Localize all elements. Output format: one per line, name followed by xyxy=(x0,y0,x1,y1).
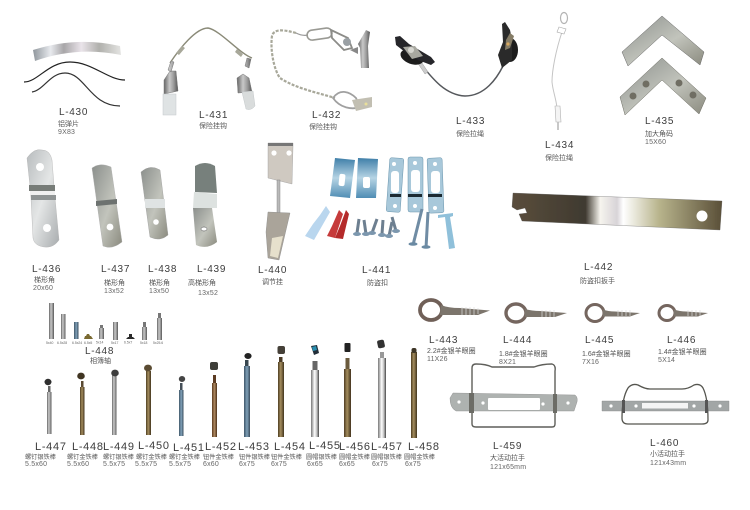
icon: eye screw xyxy=(659,306,708,320)
label: L-436: 梯形角 xyxy=(34,275,55,284)
label: L-432: 保险挂钩 xyxy=(309,122,337,131)
label: L-441 xyxy=(362,265,391,287)
label: L-437: L-437 xyxy=(101,264,130,275)
label: L-459 xyxy=(490,441,526,471)
icon: two chevron corner plates xyxy=(620,16,706,115)
label: L-439: L-439 xyxy=(197,264,226,275)
label: L-452: 钮件金铁棒 xyxy=(203,453,235,461)
label: L-454 xyxy=(271,441,306,468)
label: L-434: L-434 xyxy=(545,140,574,151)
labels: post sizes: 6.5x28 xyxy=(57,341,67,345)
label: L-432: L-432 xyxy=(312,110,341,121)
icon: chain with carabiner, toggle and ring plate xyxy=(271,27,372,111)
label: L-434 xyxy=(545,140,574,162)
label: L-455 xyxy=(306,440,341,468)
icon: offset clip bracket xyxy=(92,165,122,247)
product L-437 offset clip xyxy=(92,165,130,295)
label: L-437: 13x52 xyxy=(104,288,124,295)
label: L-447: 螺钉银铁棒 xyxy=(25,453,57,461)
label: L-448 xyxy=(67,441,104,468)
label: L-436: 20x60 xyxy=(33,285,53,292)
label: L-448: 螺钉金铁棒 xyxy=(67,453,99,461)
label: L-435: L-435 xyxy=(645,116,674,127)
label: L-450 xyxy=(135,440,170,468)
label: L-457: 圆帽银铁棒 xyxy=(371,453,403,461)
icon: wire with two tags xyxy=(163,28,255,115)
label: L-445 xyxy=(582,335,631,366)
label: L-449 xyxy=(103,441,135,468)
label: L-442: 防盗扣扳手 xyxy=(580,276,615,285)
label: L-452: 6x60 xyxy=(203,461,219,468)
icon: small handle with plate xyxy=(602,384,729,424)
label: L-458: 圆帽金铁棒 xyxy=(404,453,436,461)
label: L-458: 6x75 xyxy=(405,461,421,468)
labels: post sizes: 5x25.6 xyxy=(153,341,163,345)
label: L-438 xyxy=(148,264,177,295)
label: L-446: 1.4#金银羊眼圈 xyxy=(658,347,707,356)
label: L-447: L-447 xyxy=(35,441,67,453)
label: L-430: 9X83 xyxy=(58,129,75,136)
labels: post sizes: 6.5x7 xyxy=(124,340,132,344)
label: L-453: 钮件银铁棒 xyxy=(239,453,271,461)
label: L-454: 6x75 xyxy=(271,461,287,468)
label: L-433: 保险拉绳 xyxy=(456,129,484,138)
label: L-432 xyxy=(309,110,341,131)
label: L-448: L-448 xyxy=(72,441,104,453)
label: L-438: 13x50 xyxy=(149,288,169,295)
label: L-445: L-445 xyxy=(585,335,614,346)
icon: row of small posts xyxy=(49,303,162,340)
label: L-443 xyxy=(427,335,476,363)
product L-442 security wrench xyxy=(512,193,722,285)
label: L-433: L-433 xyxy=(456,116,485,127)
label: L-451: 螺钉金铁棒 xyxy=(169,453,201,461)
row of metal rods xyxy=(25,339,440,468)
icon: eye screw xyxy=(506,304,567,322)
label: L-459: 大活动拉手 xyxy=(490,453,525,462)
product L-432 safety chain xyxy=(271,27,372,131)
label: L-437 xyxy=(101,264,130,295)
label: L-451: L-451 xyxy=(173,442,205,454)
label: L-457: L-457 xyxy=(371,441,403,453)
product L-438 offset clip xyxy=(141,167,177,295)
label: L-439 xyxy=(188,264,226,297)
product L-443 eye screw xyxy=(420,300,490,363)
icon: thin white cord with loop xyxy=(552,12,568,130)
product L-435 large corner brace xyxy=(620,16,706,146)
labels: post sizes: 5x17 xyxy=(111,341,118,345)
product L-446 eye screw xyxy=(658,306,708,364)
icon: rods and nuts xyxy=(44,339,417,438)
label: L-447 xyxy=(25,441,67,468)
label: L-459: 121x65mm xyxy=(490,464,526,471)
label: L-456: 圆帽金铁棒 xyxy=(339,453,371,461)
label: L-438: 梯形角 xyxy=(149,278,170,287)
icon: offset clip bracket xyxy=(27,150,59,247)
label: L-448 album axis: L-448 xyxy=(85,346,114,357)
label: L-455: L-455 xyxy=(309,440,341,452)
icon: eye screw xyxy=(586,304,640,322)
label: L-435: 15X60 xyxy=(645,139,666,146)
label: L-454: L-454 xyxy=(274,441,306,453)
label: L-449: 螺钉银铁棒 xyxy=(103,453,135,461)
product L-436 offset clip xyxy=(27,150,61,292)
label: L-460: 121x43mm xyxy=(650,460,686,467)
label: L-446: L-446 xyxy=(667,335,696,346)
product L-448 album axis set xyxy=(46,303,163,365)
label: L-459: L-459 xyxy=(493,441,522,452)
label: L-455: 6x65 xyxy=(307,461,323,468)
label: L-450: L-450 xyxy=(138,440,170,452)
labels: post sizes: 6.5x5 xyxy=(84,341,92,345)
label: L-436 xyxy=(32,264,61,292)
icon: hanger plate, rod and wedge xyxy=(266,143,293,260)
product L-460 small movable handle xyxy=(602,384,729,467)
label: L-448 album axis: 相簿轴 xyxy=(90,356,111,365)
label: L-435: 加大角码 xyxy=(645,129,673,138)
label: L-444: L-444 xyxy=(503,335,532,346)
label: L-460 xyxy=(650,438,686,467)
label: L-431: L-431 xyxy=(199,110,228,121)
label: L-443: 2.2#金银羊眼圈 xyxy=(427,346,476,355)
label: L-444 xyxy=(499,335,548,366)
label: L-447: 5.5x60 xyxy=(25,461,47,468)
icon: offset clip bracket xyxy=(141,167,168,239)
label: L-449: 5.5x75 xyxy=(103,461,125,468)
label: L-438: L-438 xyxy=(148,264,177,275)
icon: flat metal wrench bar xyxy=(512,193,722,230)
label: L-456: L-456 xyxy=(339,441,371,453)
labels: post sizes: 6.5x24 xyxy=(72,341,82,345)
label: L-452: L-452 xyxy=(205,441,237,453)
product L-445 eye screw xyxy=(582,304,640,366)
label: L-453: 6x75 xyxy=(239,461,255,468)
label: L-439: 13x52 xyxy=(198,290,218,297)
label: L-453 xyxy=(238,441,271,468)
label: L-451: 5.5x75 xyxy=(169,461,191,468)
icon: eye screw xyxy=(420,300,490,320)
label: L-456 xyxy=(339,441,371,468)
label: L-452 xyxy=(203,441,237,468)
label: L-435 xyxy=(645,116,674,146)
product L-459 large movable handle xyxy=(450,364,577,471)
label: L-441: 防盗扣 xyxy=(367,278,388,287)
label: L-454: 钮件金铁棒 xyxy=(271,453,303,461)
label: L-449: L-449 xyxy=(103,441,135,453)
label: L-442: L-442 xyxy=(584,262,613,273)
label: L-457: 6x75 xyxy=(372,461,388,468)
label: L-451 xyxy=(169,442,205,468)
label: L-444: 8X21 xyxy=(499,359,516,366)
label: L-455: 圆帽银铁棒 xyxy=(306,453,338,461)
label: L-460: L-460 xyxy=(650,438,679,449)
product L-430 spring strips xyxy=(24,42,125,136)
label: L-444: 1.8#金银羊眼圈 xyxy=(499,349,548,358)
label: L-445: 7X16 xyxy=(582,359,599,366)
label: L-431: 保险挂钩 xyxy=(199,121,227,130)
label: L-440: 调节挂 xyxy=(262,277,283,286)
label: L-433 xyxy=(456,116,485,138)
icon: curved aluminium strip and wires xyxy=(24,42,125,106)
label: L-458 xyxy=(404,441,440,468)
label: L-456: 6x65 xyxy=(339,461,355,468)
icon: blue plates, anchors and screws xyxy=(305,157,455,249)
product L-444 eye screw xyxy=(499,304,567,366)
label: L-430 xyxy=(58,107,88,136)
product L-434 safety cord xyxy=(545,12,574,162)
label: L-441: L-441 xyxy=(362,265,391,276)
label: L-453: L-453 xyxy=(238,441,270,453)
icon: tall offset clip bracket xyxy=(193,163,217,247)
label: L-450: 5.5x75 xyxy=(135,461,157,468)
label: L-457 xyxy=(371,441,403,468)
label: L-440: L-440 xyxy=(258,265,287,276)
label: L-440 xyxy=(258,265,287,286)
label: L-445: 1.6#金银羊眼圈 xyxy=(582,349,631,358)
label: L-436: L-436 xyxy=(32,264,61,275)
label: L-434: 保险拉绳 xyxy=(545,153,573,162)
label: L-437: 梯形角 xyxy=(104,278,125,287)
label: L-458: L-458 xyxy=(408,441,440,453)
label: L-430: L-430 xyxy=(59,107,88,118)
product L-439 tall offset clip xyxy=(188,163,226,297)
labels: post sizes xyxy=(46,340,163,345)
product L-440 adjustable hanger xyxy=(258,143,293,286)
label: L-450: 螺钉金铁棒 xyxy=(136,453,168,461)
label: L-460: 小活动拉手 xyxy=(650,449,685,458)
labels: post sizes: 5x40 xyxy=(46,341,53,345)
product L-433 safety pull cord xyxy=(395,22,518,138)
label: L-448 album axis xyxy=(85,346,114,365)
icon: large handle with plate xyxy=(450,364,577,427)
label: L-443: L-443 xyxy=(429,335,458,346)
label: L-442 xyxy=(580,262,615,285)
label: L-430: 铝弹片 xyxy=(58,119,79,128)
label: L-448: 5.5x60 xyxy=(67,461,89,468)
product L-441 security set xyxy=(305,157,455,287)
label: L-443: 11X26 xyxy=(427,356,448,363)
label: L-446 xyxy=(658,335,707,364)
labels: post sizes: 5x14 xyxy=(96,340,103,344)
product L-431 safety hook xyxy=(163,28,255,130)
label: L-446: 5X14 xyxy=(658,357,675,364)
label: L-431 xyxy=(199,110,228,130)
icon: pulleys and dark cable xyxy=(395,22,518,96)
label: L-439: 高梯形角 xyxy=(188,278,216,287)
labels: post sizes: 5x18 xyxy=(140,341,147,345)
